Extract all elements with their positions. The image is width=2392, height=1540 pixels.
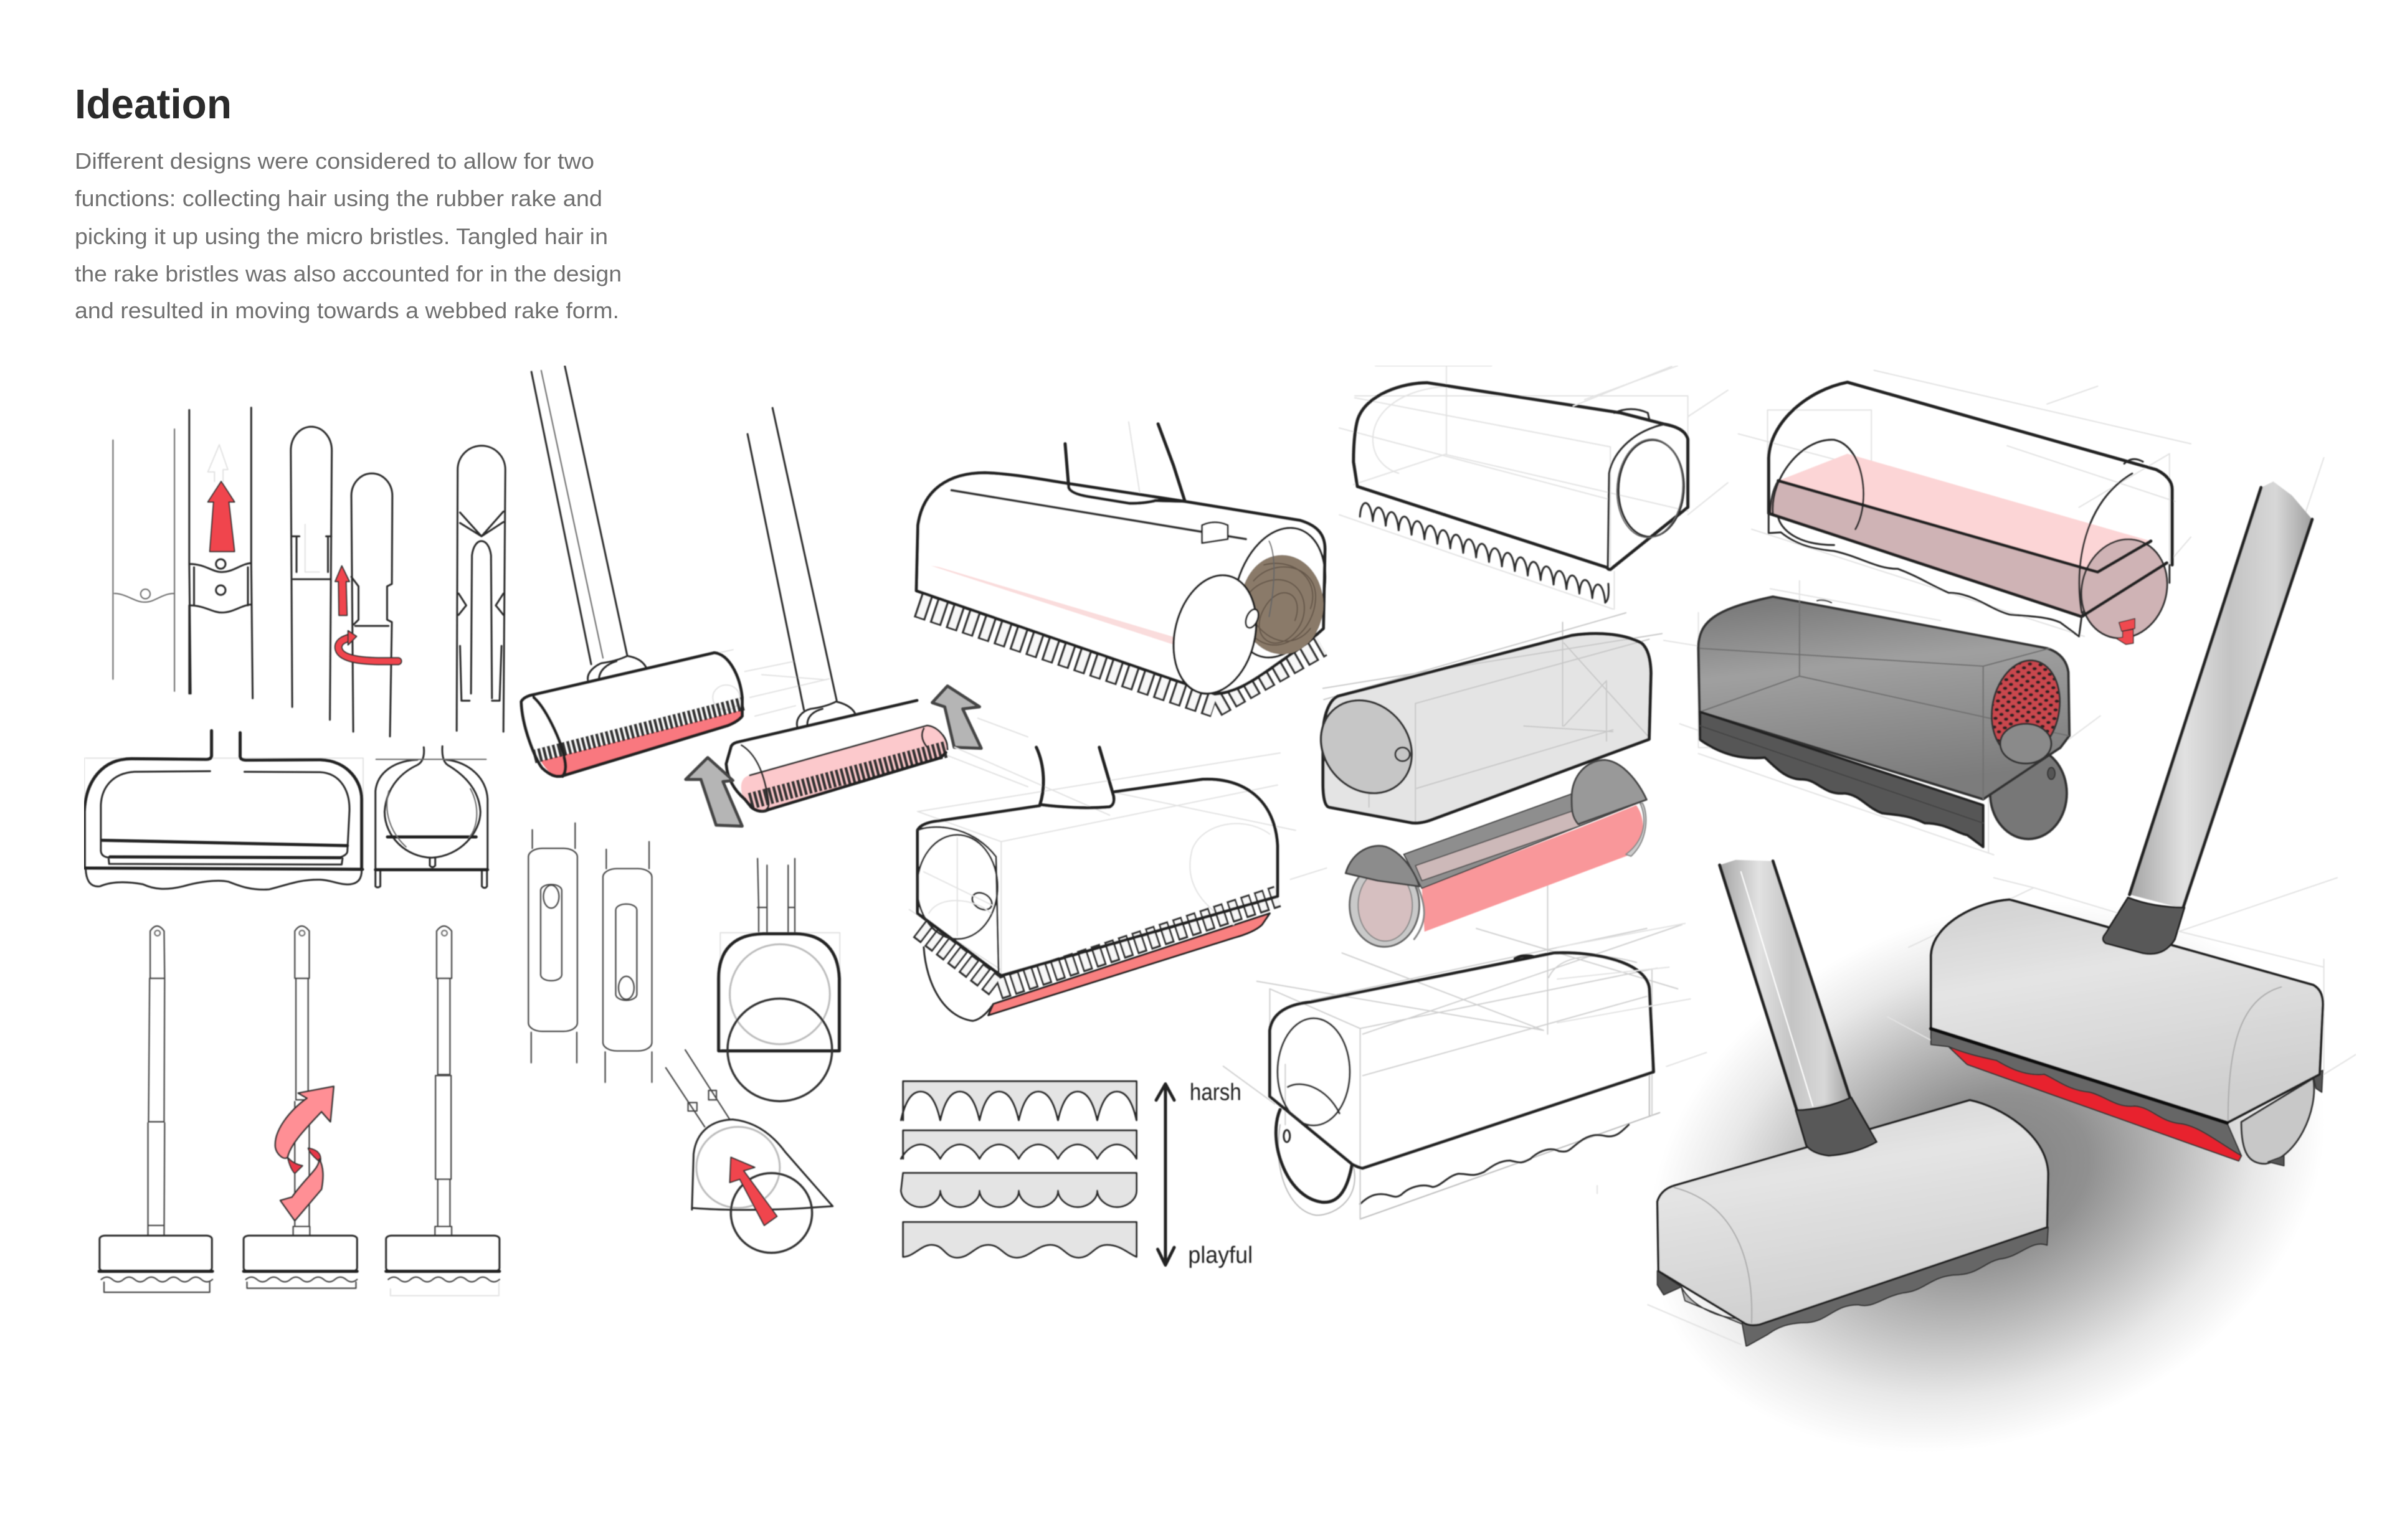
sketch: handle joint sliding with red arrow (189, 408, 253, 698)
description text: and resulted in moving towards a webbed rake form. (75, 298, 619, 323)
icon: grey arrow up left (686, 758, 742, 826)
sketch: grey shell housing (1315, 613, 1662, 823)
sketch: white housing with webbed scallops (1339, 366, 1728, 609)
sketch: slider switch up (528, 823, 577, 1063)
handle: right collar (2103, 897, 2185, 954)
sketch: twist-lock handle with red arrows (335, 473, 398, 737)
icon: grey arrow up right (933, 686, 981, 749)
title: Ideation (75, 81, 232, 128)
description text (75, 148, 622, 323)
description text: Different designs were considered to allow for two (75, 148, 594, 174)
sketch: mop extended (99, 926, 212, 1292)
sketch: roller head with rake (521, 366, 829, 777)
description text: functions: collecting hair using the rubber rake and (75, 186, 602, 211)
description text: the rake bristles was also accounted for in the design (75, 261, 622, 286)
icon: red clip (2116, 618, 2135, 645)
sketch: handle joint closed (113, 429, 174, 691)
hair clump (1241, 555, 1323, 654)
scallop row harsh (901, 1081, 1136, 1120)
sketch: scallop form study (901, 1079, 1253, 1268)
sketch: mop silhouettes and slider details (99, 823, 840, 1296)
handle: left collar (1796, 1097, 1877, 1156)
sketch: roller with bristles underside (909, 747, 1327, 1021)
render: left head with handle (1557, 860, 2048, 1346)
sketch: pink roller drum with grey caps (1346, 760, 1646, 947)
sketch: clip handle (457, 446, 505, 732)
render: right head body (1887, 878, 2356, 1166)
sketch: side view hinged with red arrow (666, 1050, 833, 1253)
icon: red perforated roller window (1986, 658, 2066, 760)
sketch: perspective outline with wave rake (1223, 877, 1682, 1219)
description text: picking it up using the micro bristles. Tangled hair in (75, 224, 608, 249)
label: harsh: harsh (1190, 1079, 1241, 1105)
scallop row soft (901, 1173, 1136, 1207)
sketch: roller head with pink roller and grey arrows (726, 408, 1028, 811)
label: playful: playful (1188, 1242, 1253, 1268)
scallop row playful (903, 1222, 1136, 1257)
sketch: transparent housing with pink section (1573, 366, 2324, 645)
sketch: mop collapsed (386, 926, 500, 1296)
cast shadow (1495, 804, 2392, 1540)
render: left head body (1658, 1100, 2048, 1325)
sketches (84, 366, 2356, 1346)
sketch: mop with twist arrow (244, 926, 357, 1288)
handle: left pole (1720, 860, 1850, 1110)
red textured rake (1948, 1047, 2241, 1161)
render: right head with handle (1887, 481, 2356, 1166)
sketch: roller with bristles and hair (916, 422, 1337, 705)
scallop row medium (901, 1130, 1136, 1159)
sketch: slider switch down (603, 841, 652, 1082)
handle: right pole (2130, 481, 2312, 909)
arrow: harsh to playful scale (1156, 1084, 1174, 1265)
sketch: head front view and side view (84, 730, 488, 890)
sketch: rounded handle (291, 427, 332, 720)
sketch: side view housing and roller (719, 859, 840, 1101)
handle joint sketches (113, 408, 505, 737)
sketch: dark grey housing with red roller (1664, 581, 2100, 855)
